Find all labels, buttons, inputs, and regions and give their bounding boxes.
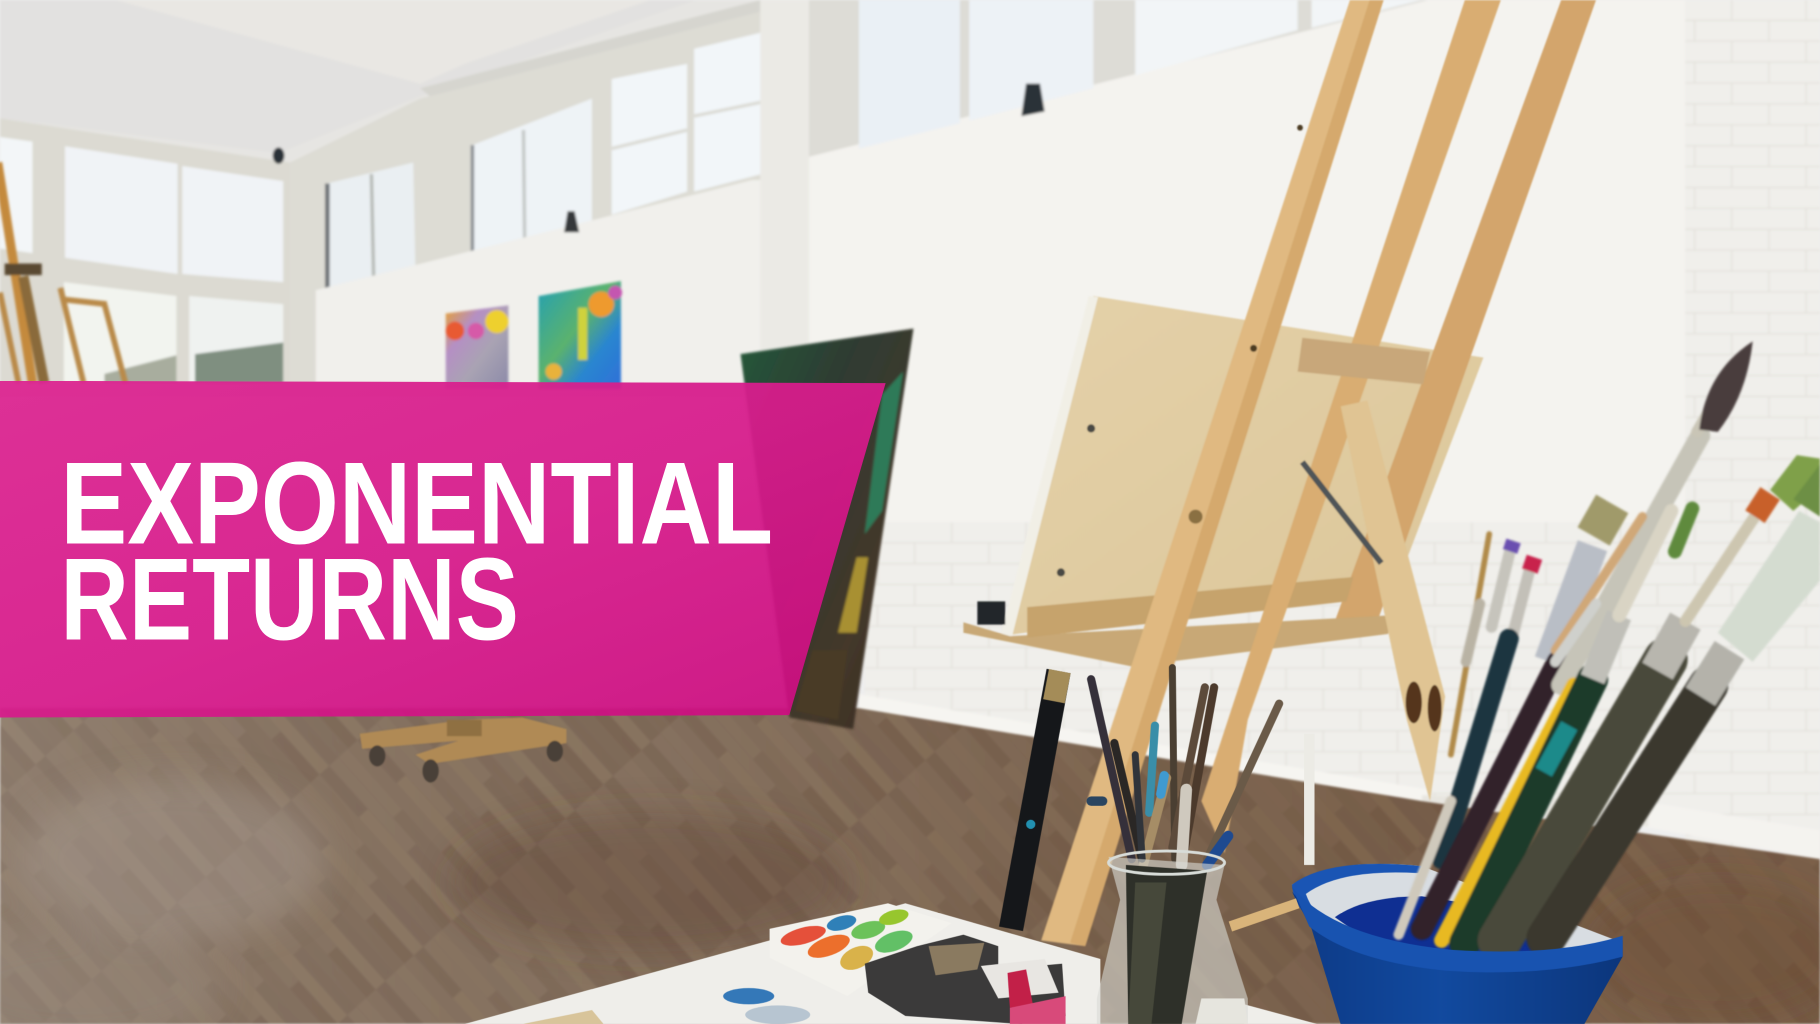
- board ledge: [1027, 577, 1353, 637]
- banner shape: [0, 381, 886, 717]
- left window wall: [0, 118, 290, 383]
- ceiling camera: [273, 147, 284, 164]
- wall paintings: [446, 281, 913, 729]
- painting: leaning dark canvas: [741, 329, 913, 729]
- ceiling: [0, 0, 1820, 395]
- green teal brush: [1465, 679, 1592, 943]
- thin brushes rear: [1451, 534, 1489, 755]
- wheeled easel base: [360, 717, 566, 783]
- headline text: RETURNS: [60, 534, 519, 665]
- security camera: [1021, 84, 1045, 116]
- tan handle: [1555, 517, 1642, 650]
- pot inner: [1292, 864, 1623, 964]
- white handle brush: [1399, 801, 1451, 935]
- metal rod: [1302, 462, 1381, 563]
- magenta banner: [0, 381, 886, 717]
- yellow brush: [1442, 685, 1574, 940]
- long white brush: [1561, 435, 1700, 685]
- pot front wall: [1292, 892, 1623, 1024]
- big brushes: [1399, 341, 1820, 943]
- sill ornament: [564, 211, 579, 232]
- black box on shelf: [977, 601, 1005, 625]
- partition wall: [316, 180, 761, 383]
- canvas board: [1001, 296, 1483, 636]
- floor tonal patches: [0, 778, 1820, 1024]
- floor stick: [1305, 734, 1314, 865]
- mid window wall: [290, 12, 761, 383]
- upper right windows: [809, 0, 1428, 157]
- headline text: EXPONENTIAL: [60, 437, 773, 568]
- flat brush green tip: [1550, 546, 1592, 662]
- cross bar behind pot: [1230, 903, 1298, 926]
- large dark brush one: [1500, 659, 1666, 940]
- easel shelf: [963, 615, 1391, 666]
- column: [760, 0, 809, 383]
- top block: [1298, 338, 1430, 384]
- painting: abstract purple: [446, 305, 508, 389]
- maroon brush: [1422, 662, 1558, 929]
- table: [464, 903, 1317, 1024]
- front post: [1041, 0, 1384, 946]
- blue brush pot: [1292, 341, 1820, 1024]
- left background easel: [0, 163, 125, 383]
- glass jar: [1097, 851, 1248, 1024]
- wooden floor: [0, 708, 1820, 1024]
- watercolor palette: [770, 903, 952, 996]
- headline text: [60, 437, 773, 665]
- paint tubes pile: [865, 935, 1066, 1024]
- rear brace: [1341, 401, 1445, 801]
- painting: abstract teal: [539, 281, 622, 389]
- small brushes in jar: [1091, 668, 1279, 865]
- back post: [1335, 0, 1596, 627]
- large wooden easel: [963, 0, 1596, 946]
- middle post: [1201, 0, 1501, 853]
- large dark brush two: [1546, 685, 1709, 938]
- right wall: [809, 0, 1685, 534]
- baseboard: [859, 694, 1820, 859]
- brick wall: [865, 0, 1820, 848]
- black marker pen: [1011, 671, 1060, 929]
